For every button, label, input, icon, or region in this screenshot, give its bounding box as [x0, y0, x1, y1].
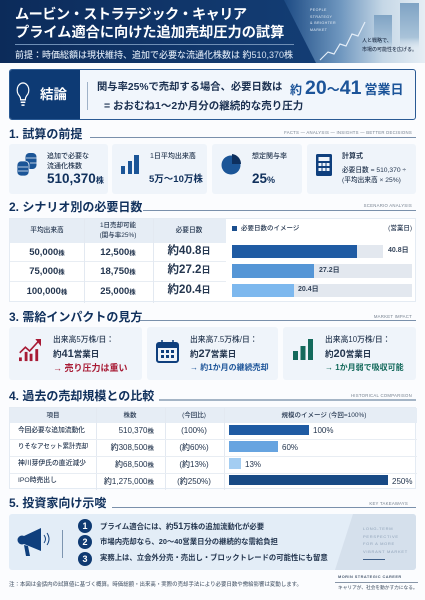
conclusion label: 結論 — [40, 87, 67, 102]
bar: 100% — [229, 425, 309, 435]
takeaway 3 — [78, 552, 92, 566]
bar: 27.2 — [232, 264, 314, 278]
icon: pie — [222, 154, 241, 174]
scenario table: 12,500株 — [100, 247, 136, 258]
card: 75k: 約27営業日 — [190, 348, 236, 360]
takeaways panel: 市場内売却なら、20～40営業日分の継続的な需給負担 — [100, 537, 278, 546]
header tagline — [362, 38, 417, 53]
scenario table: 27.2日 — [319, 267, 340, 274]
bar: 20.4 — [232, 284, 294, 297]
scenario table — [9, 218, 416, 302]
card: 75k — [147, 327, 278, 380]
card: 50k: 約41営業日 — [53, 348, 99, 360]
comparison table — [9, 407, 416, 489]
section 2 rule — [143, 210, 416, 211]
takeaways panel: 実務上は、立会外分売・売出し・ブロックトレードの可能性にも留意 — [100, 553, 328, 562]
scenario table: 平均出来高 — [30, 227, 64, 234]
row 3: 神川芽伊氏の直近減少 — [18, 460, 86, 467]
takeaway 2 — [78, 535, 92, 549]
card: volume — [112, 144, 207, 194]
scenario table: 1日売却可能 — [100, 222, 136, 229]
table header — [10, 219, 226, 243]
bar: 60% — [229, 441, 278, 452]
scenario table: 約27.2日 — [168, 264, 210, 276]
card: 75k: → 約1か月の継続売却 — [190, 363, 269, 372]
card: 75k: 出来高7.5万株/日： — [190, 335, 258, 344]
header image caption: PEOPLE — [310, 8, 327, 12]
card: volume: 5万～10万株 — [149, 174, 203, 185]
title — [15, 6, 284, 41]
scenario table: 必要日数 — [176, 227, 202, 234]
header tagline: 市場の可能性を広げる。 — [362, 47, 417, 53]
icon: calculator — [316, 154, 332, 176]
table header — [10, 408, 417, 423]
conclusion subtext: = おおむね1～2か月分の継続的な売り圧力 — [104, 100, 303, 112]
row 3: 100,000株 — [27, 286, 67, 297]
section 2 tag: SCENARIO ANALYSIS — [364, 203, 412, 208]
comparison table: 250% — [392, 477, 412, 486]
row 2: 75,000株 — [29, 266, 65, 277]
section 2 heading: 2. シナリオ別の必要日数 — [9, 200, 142, 214]
header tagline: 人と戦略で、 — [362, 38, 392, 44]
comparison table: 項目 — [46, 412, 60, 419]
header image caption: STRATEGY — [310, 14, 332, 18]
row dividers — [10, 261, 226, 262]
card: formula: 計算式 — [342, 153, 363, 160]
card: shares: 510,370株 — [47, 171, 104, 186]
scenario table: (関与率25%) — [100, 232, 136, 239]
card: formula: 必要日数 = 510,370 ÷ — [342, 167, 406, 174]
panel divider — [62, 530, 63, 558]
card: shares — [9, 144, 108, 194]
section 1 tag: FACTS — ANALYSIS — INSIGHTS — BETTER DECISIONS — [284, 130, 412, 135]
scenario table: 40.8日 — [388, 247, 409, 254]
panel image underline — [363, 559, 385, 560]
section 5 tag: KEY TAKEAWAYS — [369, 501, 408, 506]
header rule — [15, 43, 294, 46]
comparison table: 約308,500株 — [111, 443, 154, 452]
title: ムービン・ストラテジック・キャリア — [15, 7, 247, 23]
comparison table: 60% — [282, 443, 298, 452]
conclusion panel — [9, 69, 416, 120]
takeaway 1 — [78, 519, 92, 533]
section 3 rule — [140, 320, 416, 321]
comparison table: 100% — [313, 426, 333, 435]
card: 100k: → 1か月弱で吸収可能 — [325, 363, 404, 372]
section 3 tag: MARKET IMPACT — [374, 314, 412, 319]
section 4 heading: 4. 過去の売却規模との比較 — [9, 389, 154, 403]
conclusion label — [9, 69, 80, 120]
card: shares: 流通化株数 — [47, 162, 82, 170]
section 1 heading: 1. 試算の前提 — [9, 127, 82, 141]
row 2: りそなアセット累計売却 — [18, 443, 88, 450]
comparison table: 約68,500株 — [115, 460, 154, 469]
scenario table: (営業日) — [388, 225, 412, 232]
card: 100k — [283, 327, 416, 380]
icon: calendar — [156, 340, 179, 363]
takeaways panel — [9, 514, 416, 570]
scenario table: 20.4日 — [298, 286, 319, 293]
icon: rising chart — [19, 339, 41, 362]
bar: 40.8 — [232, 245, 357, 258]
scenario table: 18,750株 — [100, 266, 136, 277]
icon: green bars — [293, 339, 313, 360]
card: participation: 25% — [252, 171, 275, 186]
icon: coins — [17, 153, 36, 176]
icon: megaphone — [18, 528, 50, 556]
conclusion figure: 約20～41営業日 — [290, 77, 403, 99]
header image caption — [310, 8, 336, 32]
icon: bars — [121, 155, 139, 174]
section 5 heading: 5. 投資家向け示唆 — [9, 496, 106, 510]
conclusion main text: 関与率25%で売却する場合、必要日数は — [97, 82, 282, 93]
comparison table: (約60%) — [179, 443, 209, 452]
row 4: IPO時売出し — [18, 477, 57, 484]
footnote: 注：本図は会話内の試算値に基づく概算。時価総額・出来高・実際の売却手法により必要日数や需給影響は変動します。 — [9, 582, 302, 588]
row 1: 今回必要な追加流動化 — [18, 427, 85, 434]
takeaway 3: 3 — [82, 554, 88, 564]
comparison table: (100%) — [181, 426, 207, 435]
card: 50k — [9, 327, 142, 380]
card: participation: 想定関与率 — [252, 153, 287, 160]
comparison table: 510,370株 — [119, 426, 154, 435]
header image caption: & BRIGHTER — [310, 21, 336, 25]
section 1 rule — [90, 137, 416, 138]
card: volume: 1日平均出来高 — [150, 153, 196, 160]
comparison table: (今回比) — [182, 412, 206, 419]
comparison table: 約1,275,000株 — [104, 477, 154, 486]
card: 50k: → 売り圧力は重い — [53, 363, 128, 373]
icon: light bulb — [16, 82, 30, 106]
comparison table: 株数 — [124, 412, 136, 419]
panel image text — [363, 526, 408, 554]
card: 100k: 約20営業日 — [325, 348, 371, 360]
header banner — [0, 0, 425, 63]
card: 50k: 出来高5万株/日： — [53, 335, 114, 344]
comparison table: 規模のイメージ (今回=100%) — [282, 412, 366, 419]
bar: 250% — [229, 475, 388, 485]
panel image text: VIBRANT MARKET — [363, 548, 408, 554]
footer rule — [335, 581, 418, 584]
header city image — [284, 0, 425, 63]
card: participation — [212, 144, 302, 194]
takeaway 2: 2 — [82, 537, 88, 547]
scenario table: 必要日数のイメージ — [241, 225, 299, 232]
scenario table: 約40.8日 — [168, 245, 210, 257]
card: formula — [307, 144, 416, 194]
title: プライム適合に向けた追加売却圧力の試算 — [15, 25, 284, 41]
takeaways panel: プライム適合には、約51万株の追加流動化が必要 — [100, 521, 264, 531]
panel image — [335, 514, 416, 570]
section 3 heading: 3. 需給インパクトの見方 — [9, 310, 142, 324]
row 1: 50,000株 — [29, 247, 65, 258]
section 5 rule — [112, 507, 416, 508]
panel image text: LONG-TERM — [363, 526, 393, 531]
comparison table: (約250%) — [177, 477, 211, 486]
section 4 rule — [159, 399, 416, 401]
card: shares: 追加で必要な — [47, 153, 89, 160]
scenario table: 25,000株 — [100, 286, 136, 297]
bar: 13% — [229, 458, 241, 469]
premise line: 前提：時価総額は現状維持、追加で必要な流通化株数は 約510,370株 — [15, 50, 293, 60]
takeaway 1: 1 — [82, 521, 88, 531]
footer brand: MORIN STRATEGIC CAREER — [338, 574, 402, 579]
panel image text: PERSPECTIVE — [363, 534, 399, 538]
card: formula: (平均出来高 × 25%) — [342, 177, 401, 184]
scenario table: 約20.4日 — [168, 284, 210, 296]
conclusion divider — [87, 82, 88, 110]
footer tagline: キャリアが、社会を動かす力になる。 — [338, 585, 418, 590]
panel image text: FOR A MORE — [363, 541, 395, 546]
card: 100k: 出来高10万株/日： — [325, 335, 390, 344]
comparison table: 13% — [245, 460, 261, 469]
section 4 tag: HISTORICAL COMPARISON — [351, 393, 412, 398]
legend — [232, 226, 237, 231]
comparison table: (約13%) — [179, 460, 209, 469]
header image caption: MARKET — [310, 28, 327, 32]
